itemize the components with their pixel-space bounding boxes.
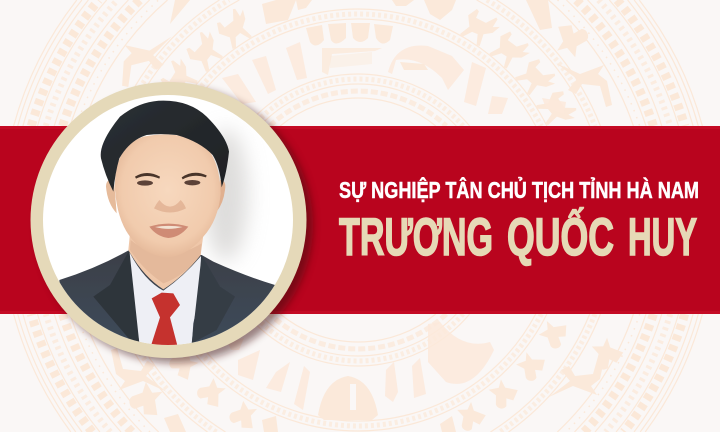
portrait photo: [43, 95, 293, 347]
name heading: QUỐC: [507, 207, 614, 267]
animal ring, top: [156, 0, 580, 132]
photo background: [43, 95, 293, 345]
cranes and birds, outer ring: [111, 0, 626, 432]
ears: [106, 180, 117, 213]
shirt: [128, 250, 201, 347]
mouth: [149, 224, 188, 238]
lapels: [93, 250, 139, 343]
nose: [154, 200, 186, 212]
bird ring, bottom: [167, 316, 571, 432]
hair: [101, 101, 229, 192]
head shadow: [204, 129, 248, 261]
eyebrows: [135, 173, 160, 179]
suit: [59, 250, 275, 347]
person: [59, 101, 275, 347]
red band: [0, 126, 720, 314]
house and boat, inner ring bottom: [228, 322, 494, 420]
neck: [128, 236, 203, 290]
eyes: [137, 180, 153, 186]
face: [115, 134, 221, 257]
name heading: [339, 207, 697, 267]
portrait ring: [30, 82, 306, 358]
human figures and boats, inner ring top: [222, 23, 566, 114]
tie: [151, 293, 180, 347]
band highlight edges: [0, 126, 720, 314]
name heading: TRƯƠNG: [339, 208, 493, 267]
portrait shadow: [37, 87, 313, 363]
